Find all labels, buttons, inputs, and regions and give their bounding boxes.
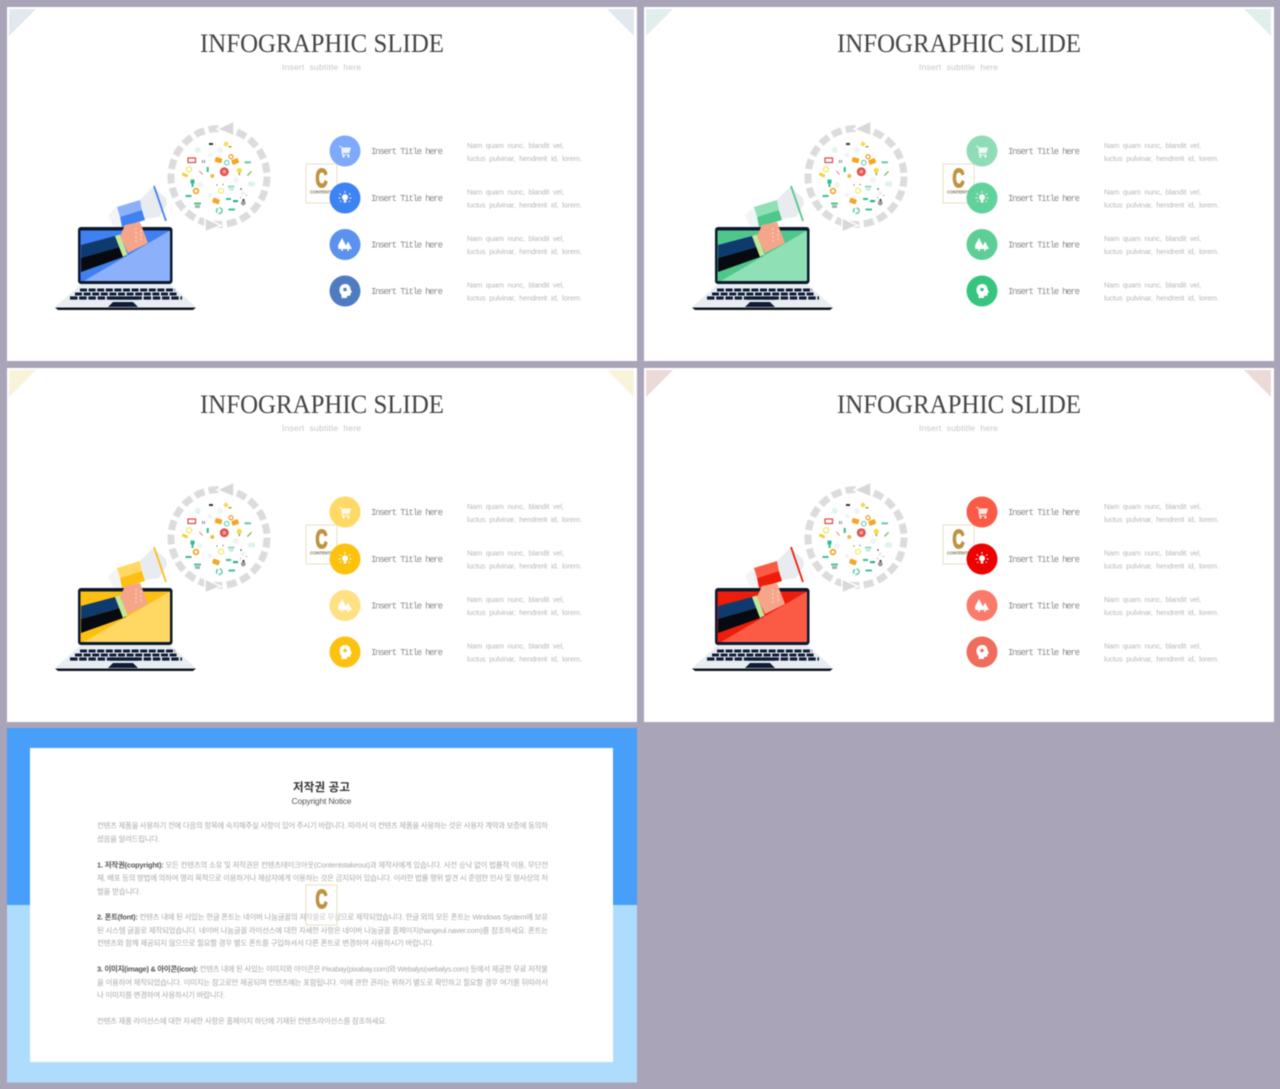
icon cluster bbox=[182, 141, 255, 214]
item 3 bbox=[966, 590, 1219, 621]
notice section 3: 3. 이미지(image) & 아이콘(icon): 컨텐츠 내에 된 사있는 이미지와 아이콘은 Pixabay(pixabay.com)와 Webalys(webalys.com) 등에서 제공한 무료 저작물 bbox=[97, 964, 548, 974]
item 2 bbox=[330, 182, 582, 214]
item 1: Nam quam nunc, blandit vel, bbox=[1104, 502, 1201, 511]
item 4: luctus pulvinar, hendrerit id, lorem. bbox=[467, 294, 582, 302]
item 2 bbox=[966, 182, 1219, 214]
item 2: Nam quam nunc, blandit vel, bbox=[467, 548, 564, 558]
item 3 bbox=[330, 229, 582, 260]
item 4: Insert Title here bbox=[1008, 648, 1080, 658]
watermark bbox=[306, 884, 337, 925]
notice subheading: Copyright Notice bbox=[292, 796, 352, 806]
watermark: C bbox=[952, 163, 965, 193]
watermark: C bbox=[952, 524, 965, 554]
item 4: Nam quam nunc, blandit vel, bbox=[1104, 642, 1201, 650]
item 4: Insert Title here bbox=[371, 648, 443, 658]
item 3 bbox=[330, 590, 582, 621]
watermark: C bbox=[316, 524, 328, 554]
slide 3: yellow bbox=[7, 368, 637, 722]
notice section 2 bbox=[97, 912, 548, 948]
title: INFOGRAPHIC SLIDE bbox=[837, 389, 1081, 419]
item 4: Insert Title here bbox=[371, 287, 443, 297]
item 4 bbox=[330, 276, 582, 306]
item 2: luctus pulvinar, hendrerit id, lorem. bbox=[467, 200, 582, 210]
notice intro bbox=[97, 821, 548, 844]
title: INFOGRAPHIC SLIDE bbox=[837, 28, 1081, 58]
illustration: laptop and megaphone bbox=[55, 547, 196, 671]
watermark: CONTENTS bbox=[947, 190, 970, 194]
item 1 bbox=[330, 496, 582, 528]
item 3: Insert Title here bbox=[371, 240, 443, 250]
dashed ring bbox=[171, 482, 267, 593]
item 1 bbox=[966, 496, 1219, 528]
item 1: luctus pulvinar, hendrerit id, lorem. bbox=[1104, 515, 1219, 524]
item 1 bbox=[966, 136, 1219, 166]
notice section 3: 을 이용하여 제작되었습니다. 이미지는 참고로만 제공되며 컨텐츠에는 포함됩니다. 이에 관한 권리는 위하기 별도로 확인하고 필요할 경우 여기를 뒤따라서 bbox=[97, 978, 548, 987]
item 3: luctus pulvinar, hendrerit id, lorem. bbox=[1104, 247, 1219, 256]
notice section 1: 재, 배포 등의 방법에 의하여 영리 목적으로 이용하거나 제삼자에게 이용하는 것은 금지되어 있습니다. 이러한 법률 행위 발견 시 준엄한 민사 및 형사상의 처 bbox=[97, 874, 548, 882]
item 3: Nam quam nunc, blandit vel, bbox=[467, 234, 564, 243]
item 4 bbox=[966, 636, 1219, 668]
item 1: luctus pulvinar, hendrerit id, lorem. bbox=[1104, 154, 1219, 163]
watermark bbox=[306, 524, 337, 564]
dashed ring bbox=[808, 482, 904, 593]
subtitle: Insert subtitle here bbox=[282, 423, 361, 433]
item 3: Nam quam nunc, blandit vel, bbox=[1104, 234, 1201, 243]
dashed ring bbox=[171, 121, 267, 232]
item 1: luctus pulvinar, hendrerit id, lorem. bbox=[467, 154, 582, 163]
item 2: Insert Title here bbox=[371, 194, 443, 204]
slide 1: blue bbox=[7, 7, 637, 361]
notice section 2: 컨텐츠와 함께 제공되지 않으므로 필요할 경우 별도 폰트를 구입하셔서 다른 폰트로 변경하여 사용하시기 바랍니다. bbox=[97, 938, 434, 948]
item 4: luctus pulvinar, hendrerit id, lorem. bbox=[467, 654, 582, 664]
slide 2: green bbox=[644, 7, 1274, 361]
item 2: Nam quam nunc, blandit vel, bbox=[1104, 188, 1201, 196]
subtitle: Insert subtitle here bbox=[919, 423, 998, 433]
watermark: C bbox=[316, 884, 328, 914]
item 1: Nam quam nunc, blandit vel, bbox=[467, 502, 564, 511]
item 3: luctus pulvinar, hendrerit id, lorem. bbox=[467, 608, 582, 617]
item 1: Insert Title here bbox=[1008, 147, 1080, 157]
watermark: CONTENTS bbox=[310, 550, 333, 556]
slide 4: red bbox=[644, 368, 1274, 722]
item 4 bbox=[330, 636, 582, 668]
dashed ring bbox=[808, 121, 904, 232]
illustration: laptop and megaphone bbox=[692, 186, 833, 310]
item 2: Insert Title here bbox=[371, 555, 443, 565]
slide 5: copyright notice bbox=[7, 728, 637, 1082]
icon cluster bbox=[182, 502, 255, 574]
icon cluster bbox=[819, 502, 892, 574]
item 2: Insert Title here bbox=[1008, 194, 1080, 204]
item 2: Nam quam nunc, blandit vel, bbox=[1104, 548, 1201, 558]
item 2 bbox=[330, 544, 582, 574]
item 3 bbox=[966, 229, 1219, 260]
item 2: luctus pulvinar, hendrerit id, lorem. bbox=[467, 562, 582, 570]
notice footer: 컨텐츠 제품 라이선스에 대한 자세한 사항은 홈페이지 하단에 기재된 컨텐츠라이선스를 참조하세요. bbox=[97, 1017, 387, 1026]
item 1 bbox=[330, 136, 582, 166]
illustration: laptop and megaphone bbox=[55, 186, 196, 310]
title: INFOGRAPHIC SLIDE bbox=[200, 28, 444, 58]
item 2: Nam quam nunc, blandit vel, bbox=[467, 188, 564, 196]
item 2 bbox=[966, 544, 1219, 574]
item 4: luctus pulvinar, hendrerit id, lorem. bbox=[1104, 654, 1219, 664]
item 3: Nam quam nunc, blandit vel, bbox=[1104, 595, 1201, 604]
notice section 1: 1. 저작권(copyright): 모든 컨텐츠의 소유 및 저작권은 컨텐츠테이크아웃(Contentstakeout)과 제작사에게 있습니다. 사전 승낙 없이 법률적 이용, 무단전 bbox=[97, 860, 548, 870]
item 2: Insert Title here bbox=[1008, 555, 1080, 565]
item 1: Insert Title here bbox=[371, 508, 443, 518]
item 3: luctus pulvinar, hendrerit id, lorem. bbox=[467, 247, 582, 256]
item 4: luctus pulvinar, hendrerit id, lorem. bbox=[1104, 294, 1219, 302]
item 4: Nam quam nunc, blandit vel, bbox=[467, 280, 564, 290]
item 4: Nam quam nunc, blandit vel, bbox=[1104, 280, 1201, 290]
watermark: CONTENTS bbox=[310, 190, 333, 194]
item 2: luctus pulvinar, hendrerit id, lorem. bbox=[1104, 562, 1219, 570]
item 1: Nam quam nunc, blandit vel, bbox=[467, 141, 564, 150]
notice intro: 컨텐츠 제품을 사용하기 전에 다음의 항목에 숙지해주실 사항이 있어 주시기 바랍니다. 따라서 이 컨텐츠 제품을 사용하는 것은 사용자 계약과 보증에 동의하 bbox=[97, 821, 548, 830]
item 3: Insert Title here bbox=[1008, 602, 1080, 612]
watermark bbox=[306, 163, 337, 203]
subtitle: Insert subtitle here bbox=[919, 62, 998, 72]
notice intro: 셨음을 알려드립니다. bbox=[97, 834, 160, 844]
watermark bbox=[943, 524, 974, 564]
title: INFOGRAPHIC SLIDE bbox=[200, 389, 444, 419]
notice section 1 bbox=[97, 860, 548, 896]
item 2: luctus pulvinar, hendrerit id, lorem. bbox=[1104, 200, 1219, 210]
item 3: Insert Title here bbox=[1008, 240, 1080, 250]
notice section 3 bbox=[97, 964, 548, 999]
item 3: luctus pulvinar, hendrerit id, lorem. bbox=[1104, 608, 1219, 617]
item 1: Insert Title here bbox=[371, 147, 443, 157]
notice section 1: 벌을 받습니다. bbox=[97, 887, 141, 896]
item 4: Nam quam nunc, blandit vel, bbox=[467, 642, 564, 650]
item 4 bbox=[966, 276, 1219, 306]
item 1: Insert Title here bbox=[1008, 508, 1080, 518]
notice heading: 저작권 공고 bbox=[293, 780, 350, 794]
item 4: Insert Title here bbox=[1008, 287, 1080, 297]
illustration: laptop and megaphone bbox=[692, 547, 833, 671]
watermark: C bbox=[316, 163, 328, 193]
watermark bbox=[943, 163, 974, 203]
icon cluster bbox=[819, 141, 892, 214]
subtitle: Insert subtitle here bbox=[282, 62, 361, 72]
notice section 3: 나 이미지를 변경하여 사용하시기 바랍니다. bbox=[97, 990, 225, 999]
item 3: Insert Title here bbox=[371, 602, 443, 612]
watermark: CONTENTS bbox=[947, 550, 970, 556]
item 3: Nam quam nunc, blandit vel, bbox=[467, 595, 564, 604]
item 1: Nam quam nunc, blandit vel, bbox=[1104, 141, 1201, 150]
item 1: luctus pulvinar, hendrerit id, lorem. bbox=[467, 515, 582, 524]
notice section 2: 된 시스템 글꼴로 제작되었습니다. 네이버 나눔글꼴 라이선스에 대한 자세한 사항은 네이버 나눔글꼴 홈페이지(hangeul.naver.com)를 참조하세요. 폰트는 bbox=[97, 926, 548, 935]
notice section 2: 2. 폰트(font): 컨텐츠 내에 된 서있는 한글 폰트는 네이버 나눔글꼴의 저작물로 무상으로 제작되었습니다. 한글 외의 모든 폰트는 Windows System에 보유 bbox=[97, 912, 548, 922]
